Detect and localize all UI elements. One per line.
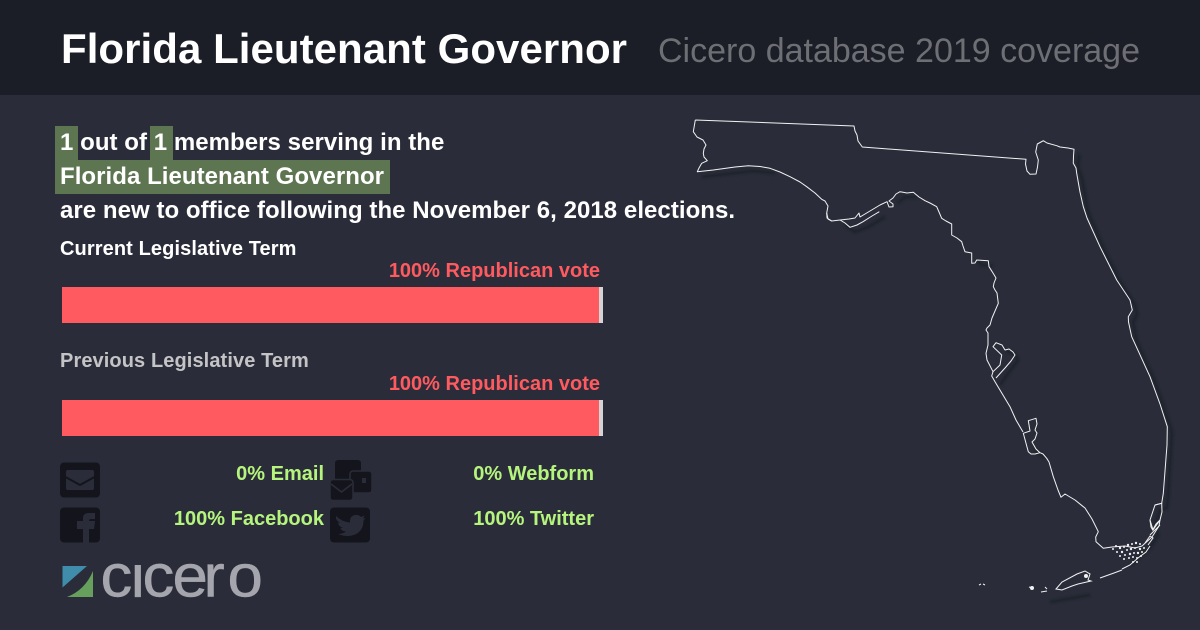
title: Florida Lieutenant Governor [61,25,627,72]
highlight: office name [55,160,390,194]
map: Florida outline [693,120,1172,602]
previous term bar [62,400,603,436]
email stat: 0% Email [236,463,324,485]
current term label: Current Legislative Term [60,238,297,260]
highlight: second number [150,126,173,160]
current term bar [62,287,603,323]
previous term label: Previous Legislative Term [60,350,309,372]
subtitle: Cicero database 2019 coverage [658,32,1140,70]
map ten thousand islands [1030,542,1145,590]
header band [0,0,1200,95]
statement line 1: 1 out of 1 members serving in the [60,129,444,156]
statement line 3: are new to office following the November 6, 2018 elections. [60,197,735,224]
previous term vote label: 100% Republican vote [389,373,600,395]
current term vote label: 100% Republican vote [389,260,600,282]
icon: webform [330,460,372,500]
facebook stat: 100% Facebook [174,508,324,530]
headline statement [55,126,735,224]
icon: email [60,462,100,498]
icon: facebook [60,508,100,542]
twitter stat: 100% Twitter [473,508,594,530]
logo mark blue [62,566,87,588]
logo wordmark: cicero [100,543,263,610]
map shadow [702,154,1172,602]
map keys and islands [979,503,1162,592]
icon: twitter [330,508,370,542]
logo: cicero [62,543,263,610]
logo mark green [67,571,93,597]
logo letter-dot mask [130,545,144,565]
webform stat: 0% Webform [473,463,594,485]
map coastline [693,120,1167,548]
statement line 2: Florida Lieutenant Governor [60,163,384,190]
highlight: first number [55,126,78,160]
map barrier island [827,212,879,227]
